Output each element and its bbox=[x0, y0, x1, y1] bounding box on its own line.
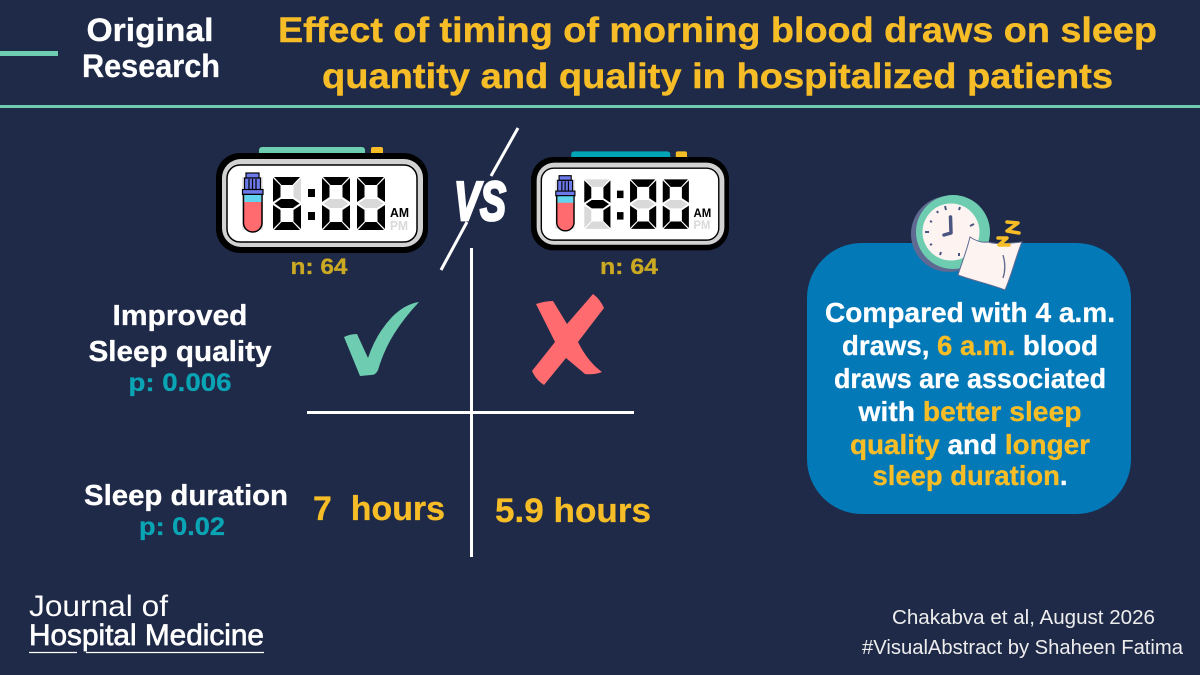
row label: sleep duration bbox=[84, 480, 288, 541]
icon: check mark bbox=[344, 302, 419, 376]
conclusion text: draws are associated bbox=[834, 363, 1106, 394]
row label: improved sleep quality: p: 0.006 bbox=[128, 369, 232, 397]
conclusion text: with better sleep bbox=[857, 396, 1082, 427]
conclusion text bbox=[825, 297, 1115, 491]
VS divider: VS bbox=[454, 170, 506, 232]
conclusion text: draws, 6 a.m. blood bbox=[842, 330, 1098, 361]
logo: Journal of Hospital Medicine: Journal of bbox=[29, 590, 169, 623]
value: 7 hours: 7 hours bbox=[313, 490, 445, 528]
logo: Journal of Hospital Medicine bbox=[29, 590, 264, 652]
icon: clock with pillow bbox=[911, 195, 1022, 290]
heading: Original Research: Research bbox=[82, 48, 220, 84]
icon: cross mark bbox=[532, 294, 604, 385]
header divider bbox=[0, 105, 1200, 108]
logo: Journal of Hospital Medicine: Hospital Medicine bbox=[29, 619, 264, 652]
label: n 64 left: n: 64 bbox=[290, 254, 348, 279]
icon: alarm clock 6:00: AM bbox=[390, 206, 409, 220]
title: Effect of timing of morning blood draws on sleep bbox=[278, 11, 1157, 50]
heading: Original Research: Original bbox=[86, 12, 214, 48]
icon: alarm clock 4:00: AM bbox=[694, 207, 711, 220]
row label: sleep duration: p: 0.02 bbox=[139, 513, 225, 541]
citation: Chakabva et al, August 2026 bbox=[892, 607, 1155, 629]
row label: improved sleep quality bbox=[88, 300, 272, 397]
accent line bbox=[0, 51, 58, 56]
label: n 64 right: n: 64 bbox=[600, 254, 659, 279]
icon: alarm clock 4:00: PM bbox=[694, 219, 710, 232]
row label: improved sleep quality: Improved bbox=[112, 300, 248, 332]
row label: improved sleep quality: Sleep quality bbox=[88, 336, 272, 368]
panel: conclusion bbox=[807, 243, 1131, 514]
citation bbox=[862, 607, 1184, 659]
conclusion text: quality and longer bbox=[850, 429, 1090, 460]
conclusion text: sleep duration. bbox=[872, 460, 1068, 491]
icon: alarm clock 6:00 bbox=[216, 147, 428, 253]
icon: alarm clock 6:00: PM bbox=[390, 219, 408, 233]
citation: #VisualAbstract by Shaheen Fatima bbox=[862, 637, 1184, 659]
title: quantity and quality in hospitalized patients bbox=[322, 57, 1113, 96]
icon: alarm clock 4:00 bbox=[531, 151, 729, 250]
value: 5.9 hours: 5.9 hours bbox=[495, 492, 651, 530]
row label: sleep duration: Sleep duration bbox=[84, 480, 288, 512]
comparison grid lines bbox=[307, 248, 634, 557]
conclusion text: Compared with 4 a.m. bbox=[825, 297, 1115, 328]
heading: Original Research bbox=[82, 12, 220, 84]
VS divider bbox=[441, 128, 518, 270]
title bbox=[278, 11, 1157, 96]
